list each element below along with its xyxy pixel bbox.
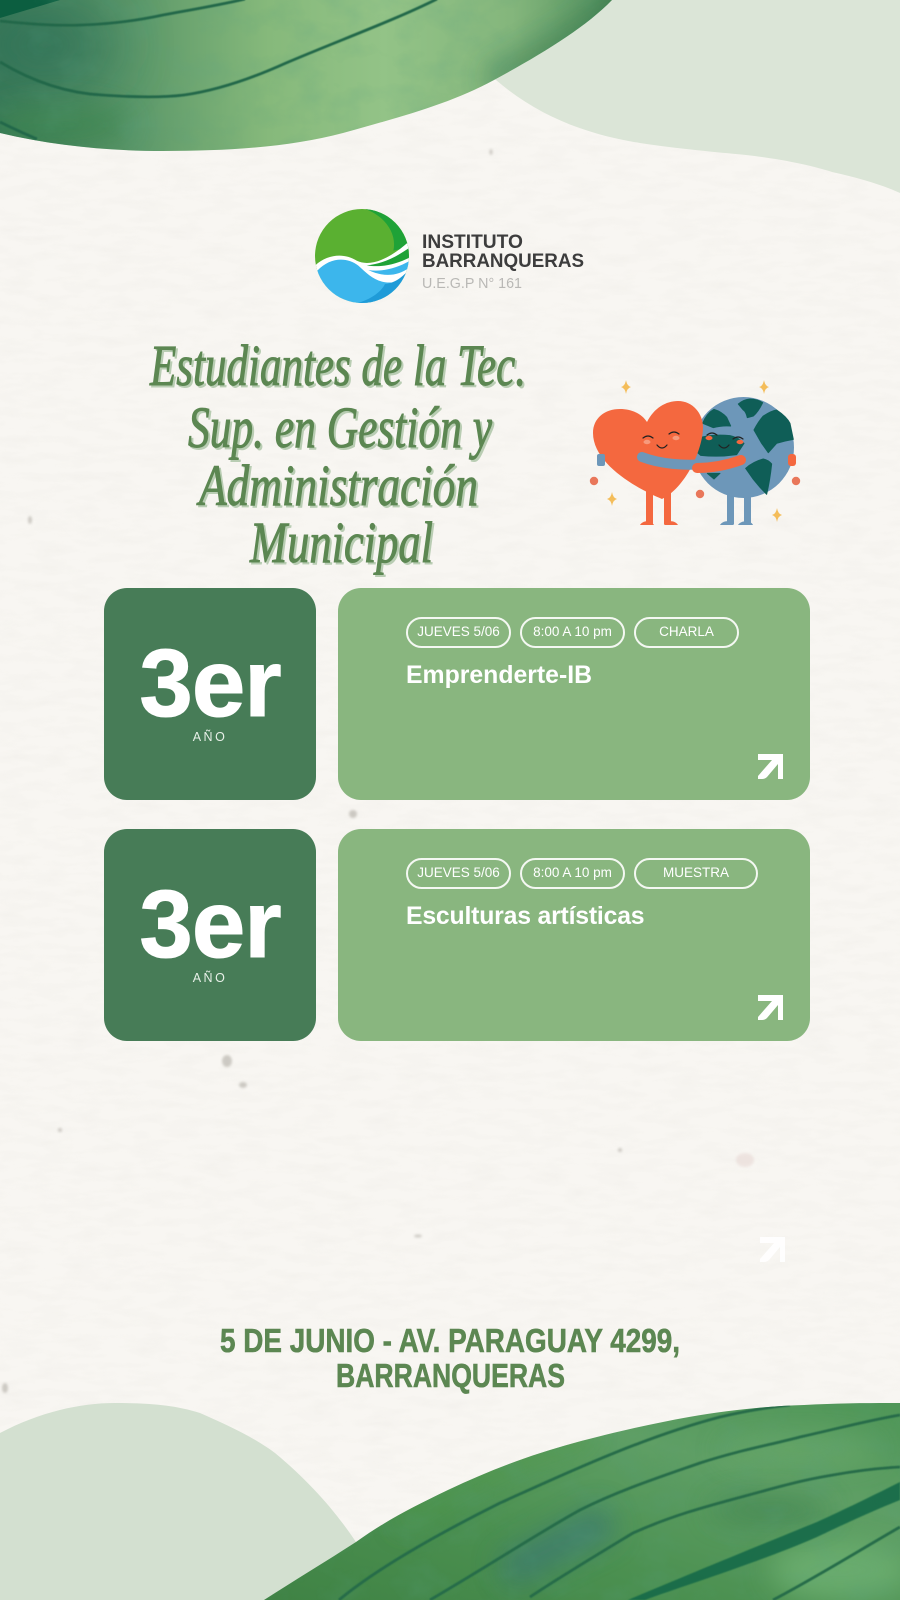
pill: day <box>406 858 511 889</box>
pill: time <box>520 858 625 889</box>
hugging arms <box>642 457 741 468</box>
year number: 3er <box>139 630 281 737</box>
light green shape top right <box>440 0 900 193</box>
title shadow <box>151 335 528 577</box>
footer: date and address <box>220 1322 680 1394</box>
logo: Instituto Barranqueras <box>315 209 584 303</box>
footer: date and address: BARRANQUERAS <box>336 1357 565 1394</box>
year label: AÑO <box>193 730 227 744</box>
title shadow: Municipal <box>251 512 435 577</box>
icon: faint white arrow <box>760 1237 785 1262</box>
cheeks <box>644 436 744 444</box>
pill: time: 8:00 A 10 pm <box>533 865 612 880</box>
title lines: Municipal <box>249 510 433 575</box>
icon: arrow <box>758 754 783 779</box>
title lines <box>149 333 526 575</box>
sparkles <box>607 380 782 522</box>
pill: day: JUEVES 5/06 <box>417 865 500 880</box>
event title: Esculturas artísticas <box>406 903 644 930</box>
pill: type: CHARLA <box>659 624 714 639</box>
year number: 3er <box>139 871 281 978</box>
faces <box>643 432 743 448</box>
pill: day: JUEVES 5/06 <box>417 624 500 639</box>
light green hill bottom left <box>0 1403 420 1600</box>
flowers <box>590 477 800 498</box>
leaf bottom right <box>260 1400 900 1600</box>
icon: heart hugging earth <box>590 380 800 525</box>
paper specks <box>2 149 754 1393</box>
title shadow: Administración <box>198 455 480 520</box>
heart character <box>593 401 703 525</box>
title lines: Administración <box>196 453 478 518</box>
leaf top left <box>0 0 640 160</box>
logo text: U.E.G.P N° 161 <box>422 275 522 292</box>
logo mark <box>315 209 409 303</box>
pill: time: 8:00 A 10 pm <box>533 624 612 639</box>
panel: year card 2 <box>104 829 316 1041</box>
panel: event card 2 <box>338 829 810 1041</box>
pill: type <box>634 617 739 648</box>
panel: year card 1 <box>104 588 316 800</box>
panel: event card 1 <box>338 588 810 800</box>
pill: day <box>406 617 511 648</box>
pill: type <box>634 858 758 889</box>
pill: type: MUESTRA <box>663 865 729 880</box>
icon: arrow <box>758 995 783 1020</box>
logo text <box>422 232 584 292</box>
pill: time <box>520 617 625 648</box>
thick dark vein <box>628 1482 900 1600</box>
earth character <box>693 397 796 525</box>
logo text: INSTITUTO <box>422 232 523 253</box>
year label: AÑO <box>193 971 227 985</box>
title <box>149 333 528 577</box>
logo text: BARRANQUERAS <box>422 251 584 272</box>
event title: Emprenderte-IB <box>406 662 592 689</box>
